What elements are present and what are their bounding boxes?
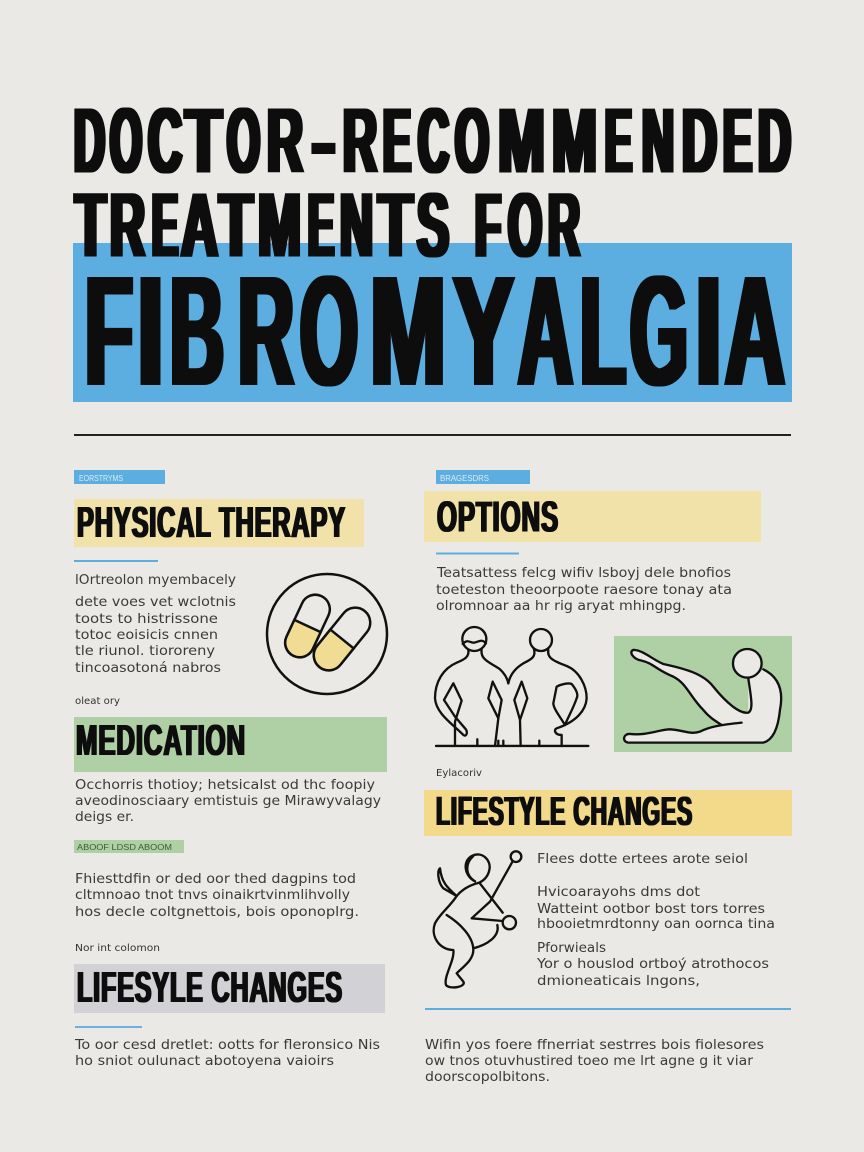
body text: ho sniot oulunact abotoyena vaioirs [75,1053,334,1069]
icon: capsules in circle [267,574,387,694]
body text: totoc eoisicis cnnen [75,627,218,643]
body text: Occhorris thotioy; hetsicalst od thc foopiy [75,777,375,793]
panel: lifesyle changes [74,964,385,1069]
heading: OPTIONS [437,494,559,542]
title block [73,88,792,419]
title line 2: T [219,174,253,276]
body text: Yor o houslod ortboý atrothocos [536,956,769,972]
title line 1: C [148,88,182,192]
body text: deigs er. [75,809,134,825]
body text: hbooietmrdtonny oan oornca tina [537,916,775,932]
closing text: ow tnos otuvhustired toeo me lrt agne g it viar [425,1053,753,1069]
icon: two standing figures [435,627,588,746]
closing text: doorscopolbitons. [425,1069,550,1085]
title line 3: R [238,244,294,419]
body text [536,851,775,989]
title line 1: E [605,88,632,192]
tag [436,470,530,484]
tag [74,840,184,853]
title line 1: E [723,88,752,192]
body text [75,572,236,676]
title line 3: A [725,244,785,419]
title line 3: O [300,244,358,419]
body text: toeteston theoorpoote raesore tonay ata [436,582,732,598]
title line 3: Y [453,244,514,419]
tag [74,470,165,484]
tag: BRAGESDRS [440,474,489,483]
title line 3: F [85,244,133,419]
title line 1: M [498,88,545,192]
title line 1: E [383,88,411,192]
body text: hos decle coltgnettois, bois oponoplrg. [75,904,359,920]
title line 1: D [682,88,717,192]
body text [75,777,381,825]
title highlight band [73,243,792,402]
heading: MEDICATION [76,717,246,765]
body text: lOrtreolon myembacely [75,572,236,588]
title line 2: O [508,174,542,276]
tag: EORSTRYMS [79,474,123,483]
title line 1: M [552,88,597,192]
title line 3: I [137,244,164,419]
title line 2: N [340,174,373,276]
title line 2: E [152,174,178,276]
closing text [425,1037,764,1085]
title line 3: I [695,244,722,419]
body text: Teatsattess felcg wifiv lsboyj dele bnofios [436,565,731,581]
closing text: Wifin yos foere ffnerriat sestrres bois fiolesores [425,1037,764,1053]
title line 3: L [580,244,626,419]
title line 1: O [227,88,260,192]
small note: oleat ory [75,696,120,707]
image: reclining stretch on green panel [614,636,792,752]
title line 2: T [75,174,106,276]
body text: Pforwieals [537,940,606,956]
title line 2: T [378,174,413,276]
panel: physical therapy [74,470,387,707]
heading: PHYSICAL THERAPY [77,499,346,547]
title line 1: R [343,88,377,192]
panel: options [424,470,792,779]
heading: LIFESYLE CHANGES [77,964,343,1012]
title line 3: G [630,244,688,419]
title line 1: N [642,88,674,192]
body text [75,871,359,920]
title line 2: R [110,174,145,276]
heading [424,491,761,542]
title line 1: T [185,88,222,192]
body text: Fhiesttdfin or ded oor thed dagpins tod [75,871,356,887]
title line 2: A [181,174,218,276]
body text: Hvicoarayohs dms dot [537,884,700,900]
title line 3: B [170,244,224,419]
body text: cltmnoao tnot tnvs oinaikrtvinmlihvolly [75,887,350,903]
body text: tle riunol. tiororeny [75,643,215,659]
title block: R [548,174,580,276]
title line 1: O [455,88,489,192]
title line 1: R [267,88,303,192]
panel: medication [74,717,387,954]
heading [74,964,385,1013]
body text: tincoasotoná nabros [75,660,221,676]
title line 3: A [518,244,573,419]
body text: toots to histrissone [75,611,218,627]
body text: dete voes vet wclotnis [75,594,236,610]
tag: ABOOF LDSD ABOOM [77,843,172,852]
title line 1: - [311,88,336,192]
body text: To oor cesd dretlet: ootts for fleronsico Nis [74,1037,380,1053]
body text [74,1037,380,1069]
heading [74,499,364,547]
title block: D [758,88,791,192]
title line 2: S [417,174,449,276]
small note: Nor int colomon [75,943,160,954]
title line 2: F [475,174,501,276]
title line 1: C [418,88,449,192]
title line 1: O [110,88,142,192]
title line 3: M [370,244,446,419]
body text: dmioneaticais lngons, [537,973,700,989]
body text: Flees dotte ertees arote seiol [537,851,748,867]
title line 2: E [308,174,334,276]
title line 1: D [74,88,105,192]
icon: exercising figure with weights [434,851,521,987]
body text: Watteint ootbor bost tors torres [537,901,765,917]
panel: lifestyle changes [424,788,792,1085]
title line 2: M [258,174,301,276]
body text: aveodinosciaary emtistuis ge Mirawyvalagy [75,793,381,809]
body text: olromnoar aa hr rig aryat mhingpg. [436,598,686,614]
body text [436,565,732,614]
small note: Eylacoriv [436,768,482,779]
